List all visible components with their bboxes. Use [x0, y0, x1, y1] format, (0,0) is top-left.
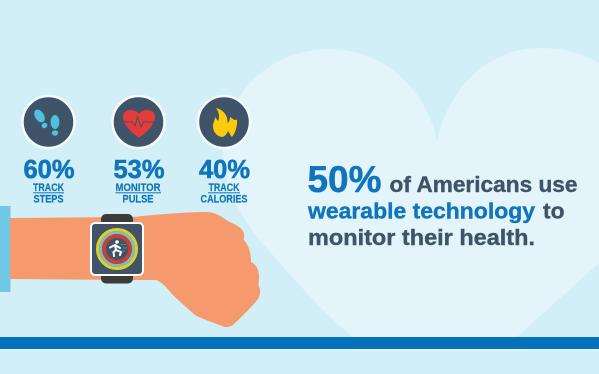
arm and hand — [10, 212, 260, 327]
stat: track calories — [198, 96, 250, 206]
icon: runner — [110, 240, 127, 256]
label track calories: CALORIES — [200, 194, 248, 206]
watch face — [91, 223, 143, 275]
label track steps — [33, 182, 64, 206]
background heart — [223, 48, 599, 337]
watch band — [101, 214, 133, 284]
headline line 1: of Americans use — [390, 172, 578, 197]
headline — [307, 159, 578, 250]
value 60%: 60% — [24, 154, 74, 184]
smart watch — [91, 214, 143, 284]
sleeve cuff — [0, 206, 10, 292]
headline line 2: wearable technology — [307, 198, 535, 224]
label monitor pulse: MONITOR — [116, 182, 161, 194]
label monitor pulse — [116, 182, 161, 206]
label track steps: TRACK — [33, 182, 64, 194]
headline line 3: monitor their health. — [308, 225, 535, 250]
icon: heart with pulse — [112, 96, 164, 148]
bottom blue bar — [0, 337, 599, 349]
headline line 2: to — [543, 198, 564, 224]
label monitor pulse: PULSE — [122, 194, 154, 206]
icon: flame — [198, 96, 250, 148]
icon: footprints — [22, 96, 74, 148]
headline line 1: 50% — [308, 159, 382, 200]
bar highlight — [0, 349, 599, 350]
activity rings — [98, 230, 136, 268]
headline line 1 — [308, 159, 578, 200]
label track calories — [200, 182, 248, 206]
label track calories: TRACK — [208, 182, 240, 194]
label track steps: STEPS — [34, 194, 64, 206]
bottom strip — [0, 350, 599, 374]
value 53%: 53% — [114, 154, 164, 184]
stat: monitor pulse — [112, 96, 164, 206]
stat: track steps — [22, 96, 74, 206]
value 40%: 40% — [199, 154, 250, 184]
